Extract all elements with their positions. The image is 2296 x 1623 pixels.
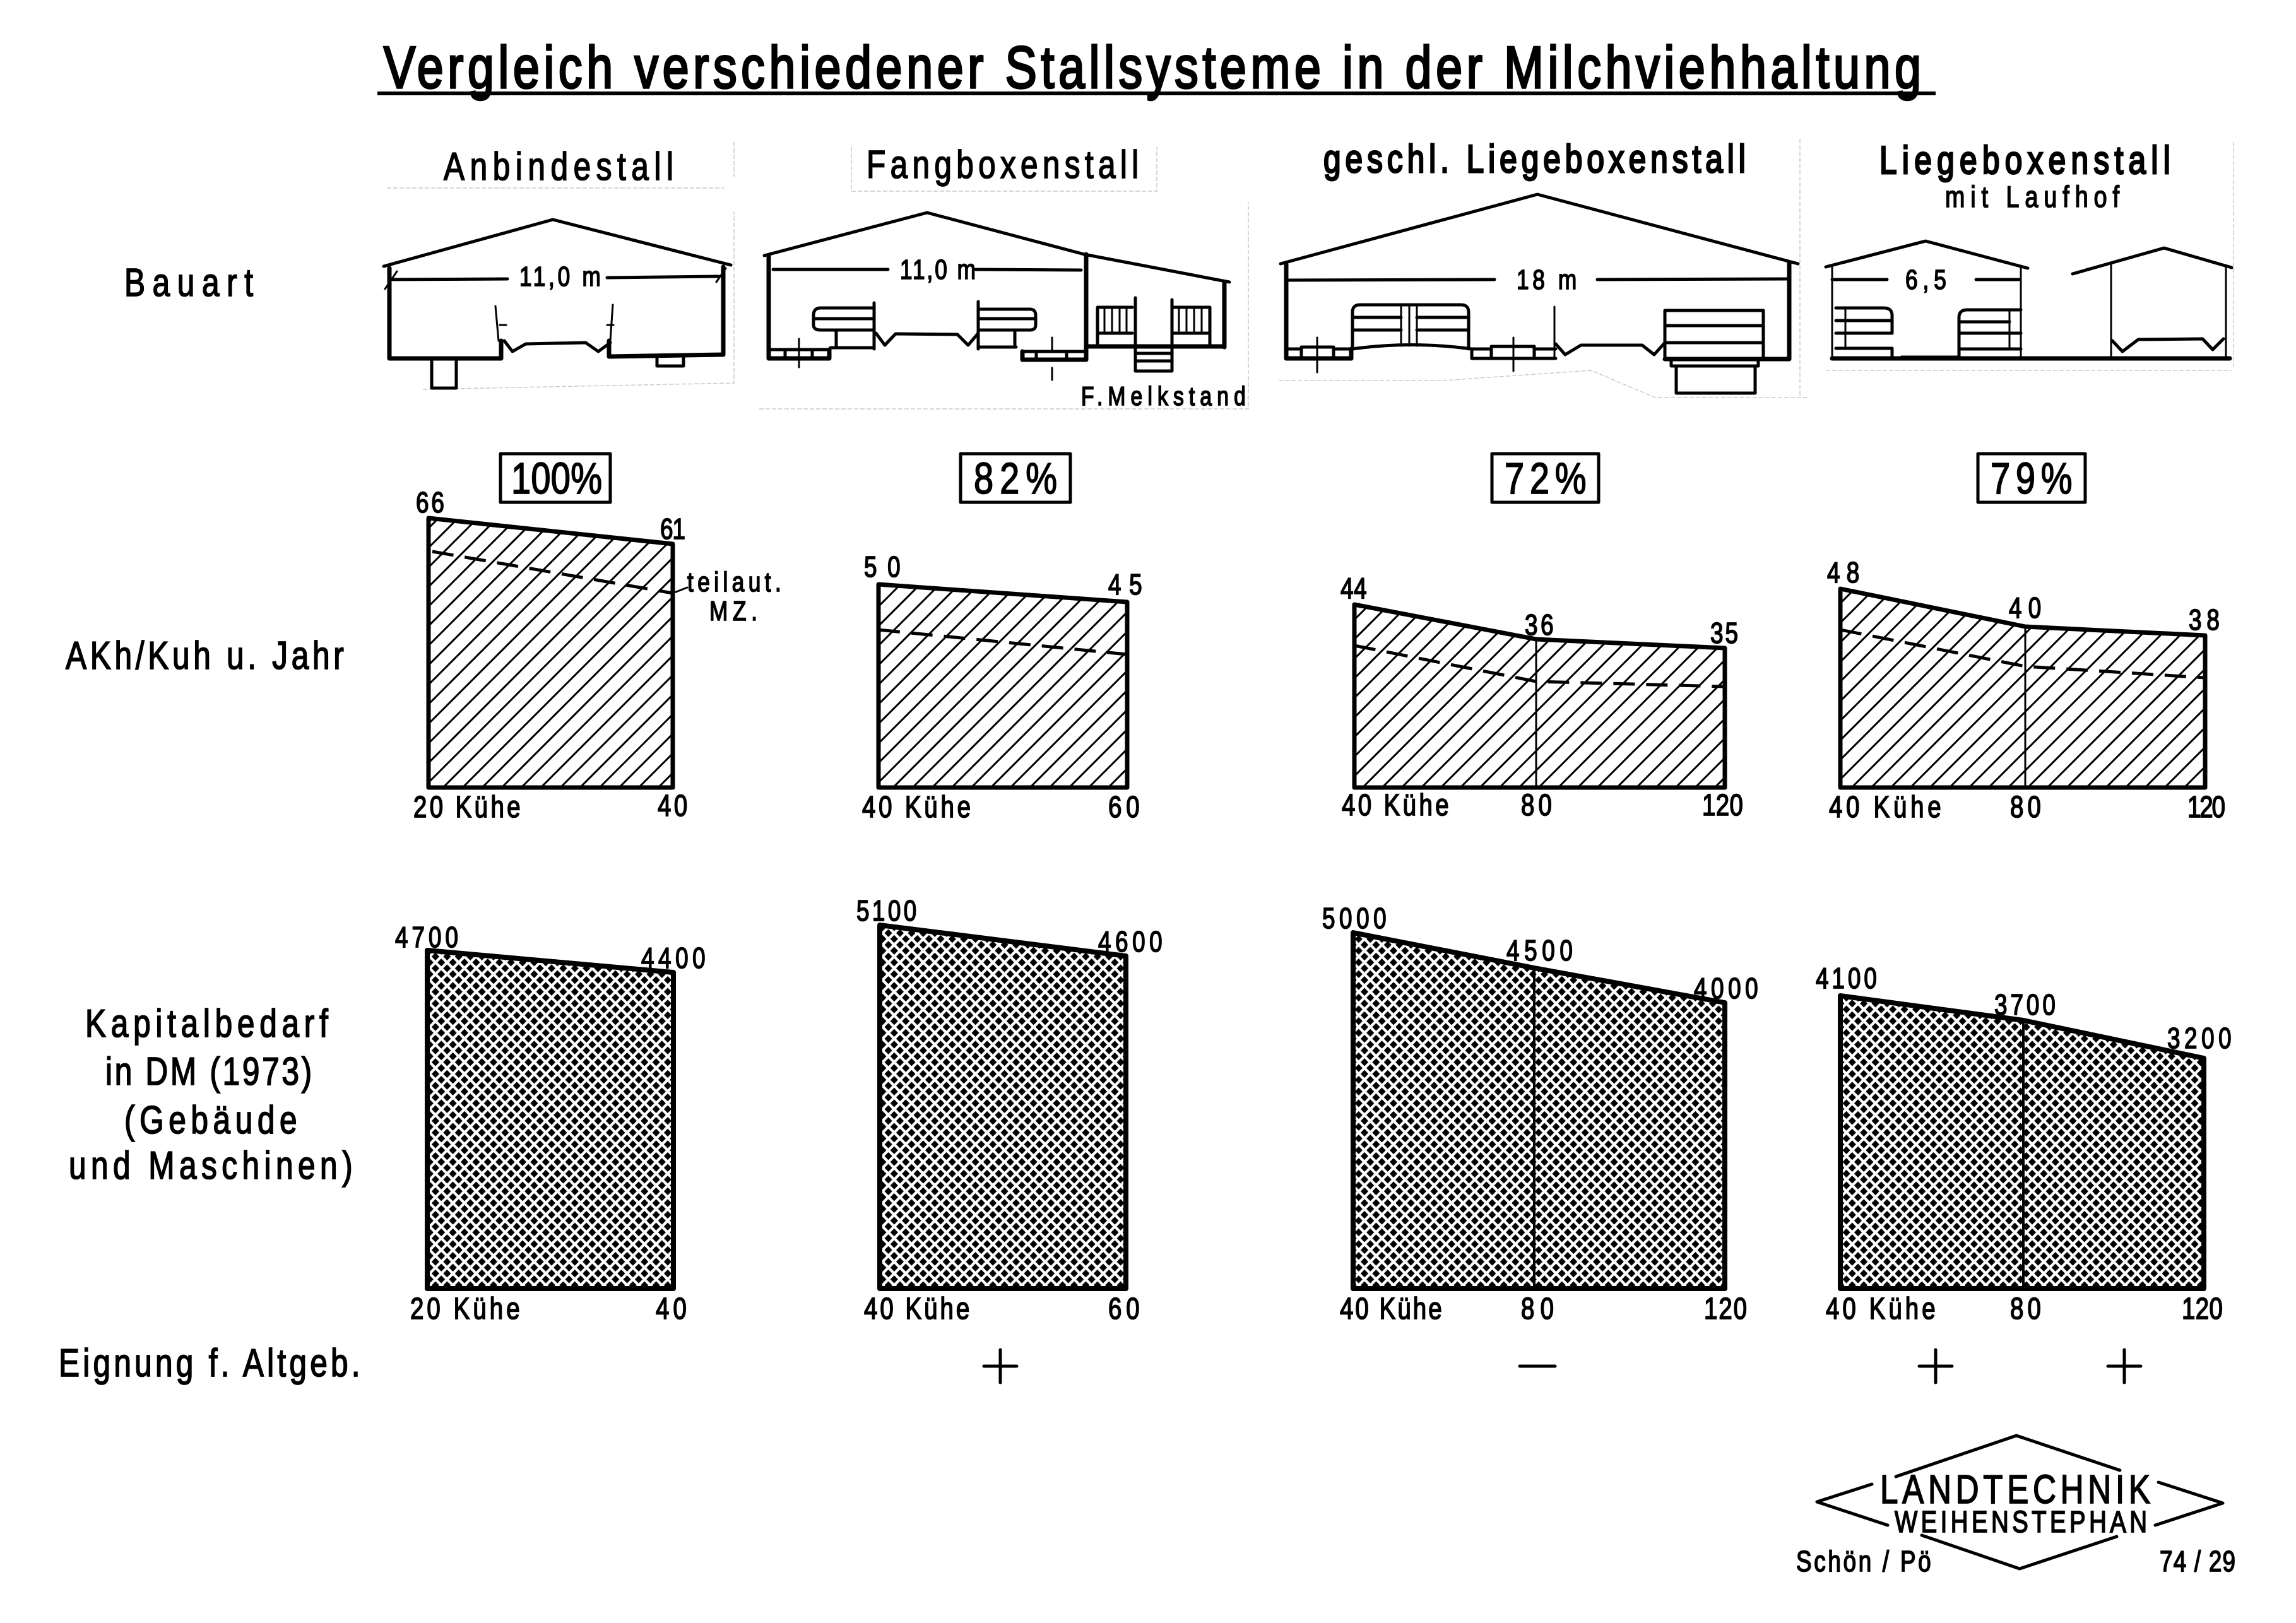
chart: Kapitalbedarf Liegeboxenstall mit Laufhof: 80 xyxy=(2010,1292,2041,1326)
chart: AKh geschlossener Liegeboxenstall: 80 xyxy=(1521,789,1552,822)
building section: geschlossener Liegeboxenstall: 18 m xyxy=(1517,264,1577,295)
chart: Kapitalbedarf Anbindestall: 4400 xyxy=(641,941,706,974)
chart: Kapitalbedarf geschlossener Liegeboxenstall: 4000 xyxy=(1694,972,1758,1005)
suitability mark: minus geschlossener Liegeboxenstall xyxy=(1520,1364,1555,1368)
chart: AKh Anbindestall: 66 xyxy=(416,486,444,519)
chart: Kapitalbedarf geschlossener Liegeboxenstall: 4500 xyxy=(1506,934,1573,967)
percentage box: 82%: 82% xyxy=(974,454,1057,503)
percentage box: 100%: 100% xyxy=(511,454,602,503)
suitability mark: plus Liegeboxenstall xyxy=(1919,1350,1952,1383)
chart: AKh Liegeboxenstall mit Laufhof: 120 xyxy=(2187,791,2225,824)
chart: AKh Fangboxenstall: 45 xyxy=(1108,568,1142,601)
chart: AKh Anbindestall: 40 xyxy=(658,789,687,823)
chart: AKh Liegeboxenstall mit Laufhof xyxy=(1827,556,2225,824)
chart: AKh Anbindestall: teilaut. xyxy=(687,567,781,598)
chart: AKh Fangboxenstall: 60 xyxy=(1108,791,1140,824)
author credit: Schön / Pö xyxy=(1796,1545,1931,1578)
chart: AKh geschlossener Liegeboxenstall: 36 xyxy=(1525,608,1554,641)
paste-up edge marks xyxy=(387,139,2234,409)
building section: Anbindestall: 11,0 m xyxy=(519,261,601,292)
chart: Kapitalbedarf Fangboxenstall: 4600 xyxy=(1098,925,1163,958)
chart: Kapitalbedarf geschlossener Liegeboxenstall: 5000 xyxy=(1322,902,1387,935)
chart: AKh geschlossener Liegeboxenstall: 35 xyxy=(1710,617,1738,649)
row label: Bauart: Bauart xyxy=(124,261,253,304)
column heading: Fangboxenstall: Fangboxenstall xyxy=(867,143,1139,186)
chart: Kapitalbedarf Fangboxenstall: 60 xyxy=(1108,1292,1140,1326)
logo: Landtechnik Weihenstephan: LANDTECHNIK xyxy=(1880,1468,2150,1512)
chart: AKh Liegeboxenstall mit Laufhof: 40 xyxy=(2009,591,2041,624)
column heading: Liegeboxenstall mit Laufhof: Liegeboxenstall xyxy=(1879,138,2170,182)
chart: Kapitalbedarf Fangboxenstall xyxy=(856,894,1163,1326)
column heading: geschl. Liegeboxenstall: geschl. Liegeboxenstall xyxy=(1323,137,1746,180)
building section: Fangboxenstall with milking parlour: 11,0 m xyxy=(900,254,976,285)
chart: AKh Anbindestall: MZ. xyxy=(709,596,757,627)
row label: AKh/Kuh u. Jahr: AKh/Kuh u. Jahr xyxy=(66,634,344,677)
chart: Kapitalbedarf Liegeboxenstall mit Laufhof: 40 Kühe xyxy=(1826,1292,1936,1326)
column heading: Liegeboxenstall mit Laufhof xyxy=(1879,138,2170,214)
percentage box: 79%: 79% xyxy=(1991,454,2073,503)
building section: Liegeboxenstall mit Laufhof xyxy=(1826,241,2232,358)
chart: AKh geschlossener Liegeboxenstall: 44 xyxy=(1340,572,1367,605)
chart: Kapitalbedarf geschlossener Liegeboxenstall: 120 xyxy=(1704,1292,1747,1326)
building section: Liegeboxenstall mit Laufhof: 6,5 xyxy=(1905,264,1946,295)
chart: Kapitalbedarf Anbindestall xyxy=(395,921,706,1326)
chart: Kapitalbedarf geschlossener Liegeboxenstall xyxy=(1322,902,1758,1326)
percentage box: 72%: 72% xyxy=(1505,454,1587,503)
title: Vergleich verschiedener Stallsysteme in der Milchviehhaltung xyxy=(384,35,1921,101)
chart: AKh Anbindestall: 61 xyxy=(660,512,685,545)
chart: Kapitalbedarf Fangboxenstall: 40 Kühe xyxy=(864,1292,969,1326)
building section: Fangboxenstall with milking parlour xyxy=(764,213,1246,411)
chart: AKh Anbindestall: 20 Kühe xyxy=(413,791,521,824)
chart: Kapitalbedarf geschlossener Liegeboxenstall: 40 Kühe xyxy=(1340,1292,1442,1326)
row label: Kapitalbedarf xyxy=(69,1001,353,1187)
chart: AKh Liegeboxenstall mit Laufhof: 38 xyxy=(2189,603,2220,636)
chart: Kapitalbedarf Liegeboxenstall mit Laufhof: 3700 xyxy=(1994,988,2056,1021)
chart: AKh Liegeboxenstall mit Laufhof: 80 xyxy=(2010,791,2041,824)
chart: Kapitalbedarf Anbindestall: 20 Kühe xyxy=(410,1292,520,1326)
chart: AKh geschlossener Liegeboxenstall: 40 Kühe xyxy=(1342,789,1449,822)
row label: Kapitalbedarf: (Gebäude xyxy=(124,1098,297,1142)
chart: AKh Liegeboxenstall mit Laufhof: 48 xyxy=(1827,556,1859,589)
column heading: Anbindestall: Anbindestall xyxy=(444,145,673,188)
chart: AKh Liegeboxenstall mit Laufhof: 40 Kühe xyxy=(1829,791,1941,824)
chart: Kapitalbedarf geschlossener Liegeboxenstall: 80 xyxy=(1521,1292,1554,1326)
suitability mark: plus Laufhof xyxy=(2108,1350,2141,1383)
row label: Kapitalbedarf: Kapitalbedarf xyxy=(85,1001,328,1045)
logo: Landtechnik Weihenstephan xyxy=(1817,1436,2223,1569)
row label: Kapitalbedarf: in DM (1973) xyxy=(105,1049,312,1093)
building section: geschlossener Liegeboxenstall xyxy=(1281,194,1798,393)
chart: Kapitalbedarf Liegeboxenstall mit Laufhof: 3200 xyxy=(2167,1022,2232,1054)
chart: AKh Fangboxenstall xyxy=(862,550,1142,824)
chart: AKh Fangboxenstall: 40 Kühe xyxy=(862,791,971,824)
chart: Kapitalbedarf Fangboxenstall: 5100 xyxy=(856,894,916,927)
chart: AKh geschlossener Liegeboxenstall: 120 xyxy=(1702,789,1743,822)
logo: Landtechnik Weihenstephan: WEIHENSTEPHAN xyxy=(1895,1506,2147,1539)
document number: 74 / 29 xyxy=(2160,1545,2235,1578)
column heading: Liegeboxenstall mit Laufhof: mit Laufhof xyxy=(1945,180,2119,214)
chart: Kapitalbedarf Liegeboxenstall mit Laufhof: 4100 xyxy=(1816,962,1877,994)
chart: Kapitalbedarf Anbindestall: 4700 xyxy=(395,921,458,953)
chart: Kapitalbedarf Liegeboxenstall mit Laufhof xyxy=(1816,962,2232,1326)
chart: AKh Fangboxenstall: 50 xyxy=(864,550,901,583)
row label: Kapitalbedarf: und Maschinen) xyxy=(69,1143,353,1187)
chart: Kapitalbedarf Anbindestall: 40 xyxy=(656,1292,687,1326)
row label: Eignung f. Altgeb.: Eignung f. Altgeb. xyxy=(59,1341,360,1384)
chart: AKh geschlossener Liegeboxenstall xyxy=(1340,572,1743,822)
building section: Fangboxenstall with milking parlour: F.Melkstand xyxy=(1081,382,1246,411)
suitability mark: plus Fangboxenstall xyxy=(984,1350,1017,1383)
chart: Kapitalbedarf Liegeboxenstall mit Laufhof: 120 xyxy=(2182,1292,2223,1326)
chart: AKh Anbindestall xyxy=(413,486,781,824)
building section: Anbindestall xyxy=(384,220,731,388)
